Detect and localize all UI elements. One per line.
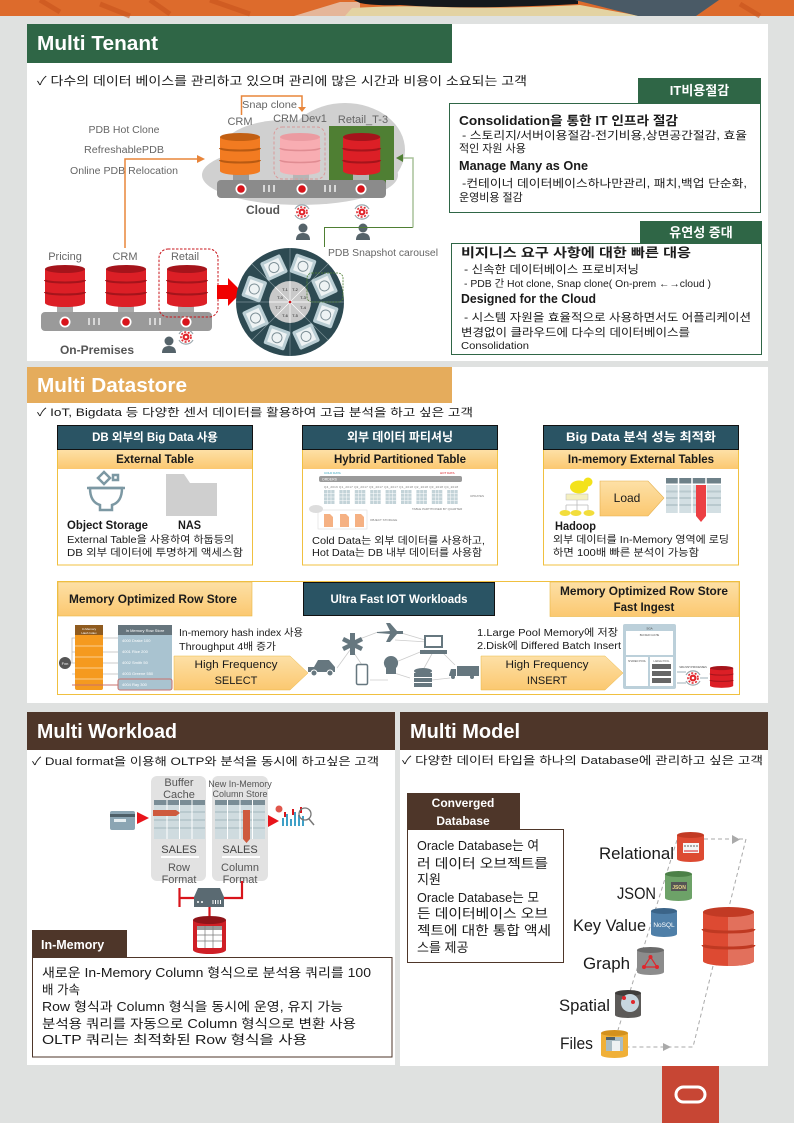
customer statement: ✓ 다양한 데이터 타입을 하나의 Database에 관리하고 싶은 고객 — [402, 753, 763, 767]
icon: database table — [193, 916, 226, 954]
callout: IT cost reduction: Manage Many as One — [459, 159, 588, 173]
chart: partition diagram: HOT DATA — [440, 471, 455, 475]
icon: car — [308, 660, 335, 676]
callout: flexibility: - 시스템 자원을 효율적으로 사용하면서도 어플리케이션 — [464, 310, 751, 324]
text: hash index note: Throughput 4배 증가 — [179, 641, 276, 653]
diagram: snapshot carousel: T-7 — [275, 305, 282, 310]
icon: converged database — [703, 907, 754, 966]
callout: In-Memory: 분석용 쿼리를 자동으로 Column 형식으로 변환 사용 — [42, 1017, 356, 1031]
highlight: selected snapshot — [307, 273, 343, 302]
connector lines — [180, 881, 242, 917]
labels: data types: Relational — [599, 844, 674, 863]
diagram: hash index and row store: 4001 Rice 200 — [122, 649, 149, 654]
row format column: Buffer — [164, 777, 194, 789]
callout: In-Memory — [32, 930, 392, 1057]
arrows: flow heads — [663, 835, 740, 1051]
icon: bulb — [384, 656, 398, 674]
card: external table: Object Storage — [67, 518, 148, 532]
chart: partition diagram: Q4_2016 Q1_2017 Q2_2017 Q3_2017 Q4_2017 Q1_2018 Q2_2018 Q3_2018 Q4_2018 — [324, 485, 458, 489]
card: external table: External Table을 사용하여 하둡등의 — [67, 533, 234, 546]
label list: clone methods: Online PDB Relocation — [70, 166, 178, 177]
diagram: cloud: CRM — [227, 116, 253, 128]
icon: files database — [601, 1030, 628, 1058]
callout: Converged Database: Database — [436, 814, 490, 828]
diagram: snapshot carousel: T-2 — [292, 287, 299, 292]
diagram: snapshot carousel: T-3 — [300, 295, 307, 300]
icon: plane — [377, 623, 403, 642]
diagram: snapshot carousel: T-1 — [282, 287, 289, 292]
diagram: SGA memory: SGA — [646, 626, 653, 630]
column format column: Column — [221, 862, 259, 874]
customer statement: ✓ 다수의 데이터 베이스를 관리하고 있으며 관리에 많은 시간과 비용이 소요되는 고객 — [37, 74, 527, 88]
callout: flexibility: Designed for the Cloud — [461, 292, 596, 306]
label: Memory Optimized Row Store: Memory Optimized Row Store — [69, 594, 237, 606]
card: hybrid partitioned table: 외부 데이터 파티셔닝 — [347, 429, 453, 444]
callout: IT cost reduction: - 스토리지/서버이용절감-전기비용,상면공간절감, 효율 — [462, 129, 747, 142]
callout: IT cost reduction: 적인 자원 사용 — [459, 142, 526, 155]
chart: partition diagram: UPDATES — [470, 494, 484, 498]
callout: Converged Database: 스를 제공 — [417, 940, 468, 955]
diagram: SGA memory — [623, 624, 733, 689]
callout: flexibility: 변경없이 클라우드에 다수의 데이터베이스를 — [461, 326, 690, 339]
arrow: High Frequency INSERT: High Frequency — [506, 659, 589, 671]
callout: IT cost reduction: -컨테이너 데이터베이스하나만관리, 패치,백업 단순화, — [462, 176, 747, 190]
diagram: snapshot carousel: T-6 — [282, 313, 289, 318]
heading: Multi Tenant — [27, 24, 452, 63]
icon: graph database — [637, 947, 664, 975]
icon: object storage — [87, 472, 125, 510]
diagram: dual format — [110, 776, 314, 954]
row format column: Row — [168, 862, 190, 874]
diagram: cloud: Cloud — [246, 203, 280, 217]
card: hybrid partitioned table: Hybrid Partitioned Table — [334, 454, 466, 466]
arrow: retail to carousel — [217, 278, 242, 306]
icon: truck — [449, 666, 479, 679]
diagram: on-premises databases: Retail — [171, 251, 199, 263]
text: large pool note — [477, 627, 621, 652]
diagram: SGA memory: SMA NSH PROCESSES — [679, 666, 707, 669]
icon: spatial database — [615, 990, 641, 1018]
arrow: snap clone — [242, 96, 306, 115]
text: large pool note: 1.Large Pool Memory에 저장 — [477, 627, 618, 639]
labels: data types — [559, 844, 674, 1053]
diagram: on-premises databases: CRM — [112, 251, 138, 263]
heading: Multi Datastore — [27, 367, 452, 403]
callout: flexibility: Consolidation — [461, 341, 529, 352]
row format column: Format — [162, 874, 196, 886]
arrow: Load: Load — [614, 491, 640, 505]
row format column — [151, 776, 206, 886]
callout: flexibility: 비지니스 요구 사항에 대한 빠른 대응 — [461, 245, 691, 260]
icon: server — [194, 888, 224, 907]
label: Memory Optimized Row Store Fast Ingest: Memory Optimized Row Store — [560, 586, 728, 598]
diagram: hash index and row store — [59, 625, 172, 690]
icon: JSON database — [665, 871, 692, 901]
card: in-memory external tables: Hadoop — [555, 519, 596, 533]
diagram: IoT devices — [308, 623, 479, 687]
card: hybrid partitioned table: Hot Data는 DB 내부 데이터를 사용함 — [312, 547, 482, 559]
icon: JSON database: JSON — [672, 885, 686, 891]
labels: data types: JSON — [617, 884, 656, 903]
diagram: hash index and row store: Fxn — [62, 661, 68, 666]
callout: In-Memory: In-Memory — [41, 938, 104, 952]
diagram: hash index and row store: In Memory — [82, 627, 97, 631]
label: Memory Optimized Row Store — [58, 582, 252, 616]
panel: Multi Model — [400, 712, 768, 1066]
column format column — [208, 776, 272, 886]
icon: NAS folder — [166, 474, 217, 516]
heading: Multi Tenant: Multi Tenant — [37, 33, 158, 55]
callout: Converged Database: Oracle Database는 모 — [417, 890, 539, 905]
label: PDB Snapshot carousel: PDB Snapshot carousel — [328, 248, 438, 259]
card: in-memory external tables: Big Data 분석 성능 최적화 — [566, 429, 716, 444]
arrow: output — [268, 815, 279, 827]
heading: Multi Workload — [27, 712, 395, 750]
column format column: Format — [223, 874, 257, 886]
arrow: Load — [600, 481, 664, 516]
diagram: cloud: Retail_T-3 — [338, 114, 388, 126]
text: hash index note — [179, 627, 303, 653]
icon: screen — [426, 637, 441, 646]
callout: Converged Database: 든 데이터베이스 오브 — [417, 906, 548, 921]
callout: IT cost reduction: 운영비용 절감 — [459, 191, 523, 204]
arrow: High Frequency INSERT: INSERT — [527, 675, 567, 687]
heading: Multi Datastore: Multi Datastore — [37, 375, 187, 397]
arrow: High Frequency SELECT: SELECT — [215, 675, 258, 687]
labels: data types: Spatial — [559, 996, 610, 1015]
box: ultra fast IoT workloads — [58, 582, 740, 694]
label list: clone methods: RefreshablePDB — [84, 145, 164, 156]
top decorative art band — [0, 0, 794, 16]
arrow: High Frequency SELECT: High Frequency — [194, 659, 278, 671]
chart: partition diagram: OBJECT STORAGE — [370, 518, 397, 522]
callout: flexibility: - PDB 간 Hot clone, Snap clone( On-prem ←→cloud ) — [464, 278, 711, 290]
callout: flexibility: - 신속한 데이터베이스 프로비저닝 — [464, 263, 639, 276]
label: Memory Optimized Row Store Fast Ingest — [550, 582, 739, 616]
card: in-memory external tables: In-memory External Tables — [568, 454, 714, 466]
icon: laptop — [420, 635, 447, 654]
icon: NoSQL database — [651, 908, 677, 937]
arrow: on-premises CRM to cloud — [125, 155, 205, 248]
customer statement: ✓ Dual format을 이용해 OLTP와 분석을 동시에 하고싶은 고객 — [32, 754, 379, 768]
callout: In-Memory: 배 가속 — [42, 983, 80, 997]
logo: Oracle — [662, 1066, 719, 1123]
icon: medical star — [342, 633, 363, 655]
panel: Multi Tenant — [27, 24, 768, 361]
heading: Multi Model: Multi Model — [410, 721, 520, 743]
diagram: on-premises databases: Pricing — [48, 251, 82, 263]
icon: analytics chart — [276, 806, 314, 826]
card: hybrid partitioned table — [302, 426, 498, 565]
card: external table: External Table — [116, 454, 194, 466]
customer statement: ✓ IoT, Bigdata 등 다양한 센서 데이터를 활용하여 고급 분석을 하고 싶은 고객 — [37, 405, 473, 419]
chart: partition diagram: TABLE PARTITIONED BY QUARTER — [412, 507, 463, 511]
diagram: cloud — [202, 103, 405, 217]
label list: clone methods — [70, 125, 178, 177]
arrow: High Frequency INSERT — [481, 656, 623, 690]
arrow: input — [137, 812, 149, 824]
text: hash index note: In-memory hash index 사용 — [179, 627, 303, 639]
icon: database — [414, 668, 432, 687]
card: external table: DB 외부의 Big Data 사용 — [92, 430, 218, 444]
diagram: hash index and row store: 4003 Greene 550 — [122, 671, 154, 676]
card: external table: DB 외부 데이터에 투명하게 액세스함 — [67, 546, 243, 559]
card: in-memory external tables: 외부 데이터를 In-Memory 영역에 로딩 — [553, 534, 729, 546]
labels: data types: Graph — [583, 954, 630, 973]
label: Memory Optimized Row Store Fast Ingest: Fast Ingest — [614, 602, 675, 614]
label list: clone methods: PDB Hot Clone — [88, 125, 160, 136]
diagram: on-premises databases: On-Premises — [60, 343, 134, 357]
diagram: hash index and row store: 4002 Smith 50 — [122, 660, 149, 665]
callout: Converged Database — [407, 793, 564, 962]
panel: Multi Workload — [27, 712, 395, 1065]
heading: Multi Workload: Multi Workload — [37, 721, 177, 743]
icons: admins — [162, 205, 370, 353]
callout: In-Memory: OLTP 쿼리는 최적화된 Row 형식을 사용 — [42, 1033, 307, 1047]
callout: IT cost reduction: IT비용절감 — [670, 83, 729, 98]
card: in-memory external tables: 하면 100배 빠른 분석이 가능함 — [553, 546, 699, 559]
chart: partition diagram: ORDERS — [322, 478, 338, 482]
icon: relational database — [677, 832, 704, 862]
column format column: SALES — [222, 844, 258, 856]
icon: Hadoop — [560, 478, 594, 516]
diagram: hash index and row store: Hash Index — [81, 631, 97, 635]
callout: Converged Database: 러 데이터 오브젝트를 — [417, 856, 548, 871]
arrow: High Frequency SELECT — [174, 656, 308, 690]
callout: Converged Database: 지원 — [417, 872, 441, 887]
diagram: hash index and row store: In Memory Row Store — [126, 628, 165, 633]
card: external table — [58, 426, 252, 565]
chart: partition diagram — [309, 471, 484, 529]
label: Ultra Fast IOT Workloads — [304, 582, 494, 616]
row format column: SALES — [161, 844, 197, 856]
label: Ultra Fast IOT Workloads: Ultra Fast IOT Workloads — [330, 594, 468, 606]
callout: In-Memory: Row 형식과 Column 형식을 동시에 운영, 유지 가능 — [42, 1000, 343, 1014]
diagram: hash index and row store: 4000 Drake 100 — [122, 638, 151, 643]
column format column: New In-Memory — [208, 779, 272, 789]
diagram: SGA memory: LARGE POOL — [653, 660, 670, 663]
chart: partition diagram: COLD DATA — [324, 471, 341, 475]
callout: Converged Database: Oracle Database는 여 — [417, 838, 539, 853]
panel: Multi Datastore — [27, 367, 768, 703]
diagram: snapshot carousel — [236, 248, 344, 356]
icon: card — [110, 811, 135, 830]
column format column: Column Store — [212, 789, 268, 799]
card: hybrid partitioned table: Cold Data는 외부 데이터를 사용하고, — [312, 534, 485, 547]
diagram: snapshot carousel: T-0 — [277, 295, 284, 300]
arrow: snapshot to cloud — [324, 154, 413, 247]
callout: IT cost reduction — [450, 78, 761, 212]
callout: flexibility: 유연성 증대 — [669, 225, 733, 240]
diagram: hash index and row store: 4004 Ray 300 — [122, 682, 148, 687]
icon: NoSQL database: NoSQL — [653, 922, 675, 929]
diagram: snapshot carousel: T-4 — [300, 305, 307, 310]
labels: data types: Key Value — [573, 916, 646, 935]
callout: Converged Database: 젝트에 대한 통합 액세 — [417, 923, 551, 938]
diagram: SGA memory: SHARED POOL — [628, 660, 647, 663]
icon: memory table — [666, 478, 721, 522]
diagram: on-premises databases — [41, 249, 218, 357]
diagram: snapshot carousel: T-5 — [292, 313, 299, 318]
diagram: cloud: CRM Dev1 — [273, 113, 327, 125]
callout: In-Memory: 새로운 In-Memory Column 형식으로 분석용 쿼리를 100 — [42, 966, 371, 980]
icon: phone — [356, 664, 368, 684]
card: in-memory external tables — [544, 426, 738, 565]
row format column: Cache — [163, 789, 195, 801]
callout: IT cost reduction: Consolidation을 통한 IT 인프라 절감 — [459, 113, 679, 128]
callout: flexibility — [452, 221, 762, 354]
callout: Converged Database: Converged — [432, 796, 494, 810]
connector: dashed flow — [618, 839, 746, 1047]
card: external table: NAS — [178, 518, 201, 532]
text: large pool note: 2.Disk에 Differed Batch Insert — [477, 640, 621, 652]
arrow: snap clone: Snap clone — [242, 100, 297, 111]
diagram: SGA memory: BUFFER CACHE — [640, 634, 660, 637]
labels: data types: Files — [560, 1034, 593, 1053]
heading: Multi Model — [400, 712, 768, 750]
